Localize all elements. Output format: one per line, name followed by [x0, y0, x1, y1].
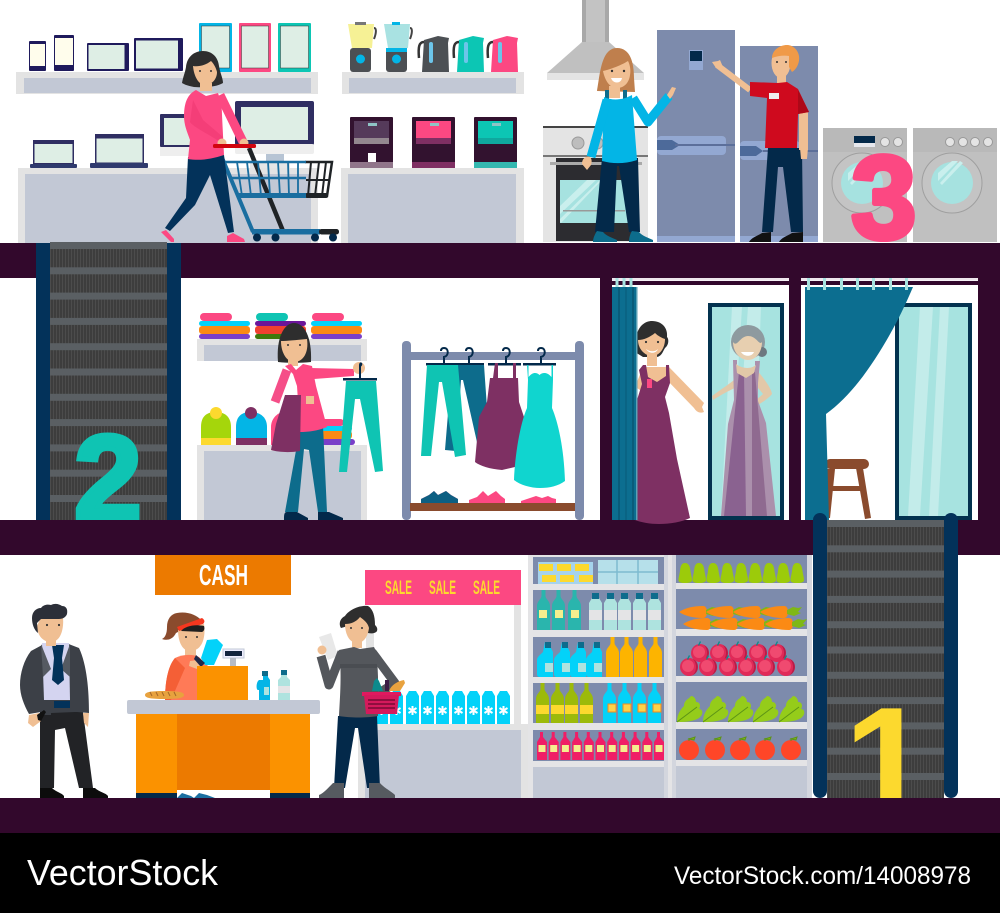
- woman customer in blue: [582, 48, 676, 242]
- mirror: [708, 303, 784, 520]
- detergent and orange bottles: [537, 637, 662, 677]
- supermarket shelves frame: [528, 555, 812, 798]
- watermark: brand: VectorStock: [27, 852, 219, 893]
- counter with hats and stack: [197, 407, 367, 520]
- cyan dress: [514, 365, 565, 488]
- mirror: [895, 303, 972, 520]
- pears: [678, 563, 804, 583]
- CASH sign: CASH: [199, 560, 248, 592]
- coffee machines: [350, 117, 517, 168]
- pink bottles: [537, 732, 664, 760]
- customer with basket: [318, 606, 405, 798]
- numeral 2: 2: [74, 410, 142, 546]
- SALE sign: SALE: [429, 577, 456, 599]
- reflection in mirror: [712, 325, 776, 516]
- escalator from floor 1 to floor 2: [813, 513, 958, 798]
- cashier: [162, 612, 223, 700]
- curtain: [805, 287, 913, 520]
- frozen fish and ice packs: [538, 560, 658, 584]
- watermark bar: [0, 833, 1000, 913]
- laptops: [30, 134, 148, 168]
- lettuce: [677, 696, 804, 722]
- salesman in red: [712, 45, 809, 242]
- floor 3: electronics and appliances: [16, 0, 997, 264]
- shopping basket: [362, 692, 401, 714]
- numeral 1: 1: [844, 675, 930, 848]
- basket goods: [372, 678, 405, 691]
- carrots: [679, 606, 807, 630]
- SALE sign: [365, 570, 521, 605]
- woman browsing jeans: [271, 323, 365, 520]
- security guard: [20, 604, 108, 798]
- CASH sign: [155, 555, 291, 595]
- curtain hooks: [616, 278, 632, 290]
- shopping cart: [218, 148, 339, 242]
- curtain hooks: [807, 278, 908, 290]
- oven and hood: [543, 0, 648, 242]
- washing machines: [823, 128, 997, 242]
- counter: coffee machines: [341, 168, 524, 243]
- teal pants on rack: [421, 365, 466, 457]
- clothes rack: [402, 341, 584, 520]
- purple dress: [475, 363, 524, 470]
- woman in gown: [629, 321, 704, 524]
- escalator from floor 2 to floor 3: [36, 242, 181, 546]
- phones and tablets: [29, 23, 311, 72]
- display counter with milk: [358, 605, 530, 798]
- monitors: [160, 101, 314, 168]
- SALE sign: SALE: [473, 577, 500, 599]
- counter: computers: [18, 168, 318, 243]
- kettles: [419, 36, 518, 72]
- floor slabs and pillars: [0, 243, 1000, 833]
- fitting room 2: [805, 278, 972, 520]
- pulled curtain: [612, 287, 638, 520]
- stool: [825, 459, 871, 519]
- green bottles and mint bottles: [537, 590, 661, 630]
- blenders: [348, 22, 412, 72]
- cash register and counter: [127, 649, 320, 798]
- SALE sign: SALE: [385, 577, 412, 599]
- shopper woman with cart: [161, 51, 248, 242]
- jeans on rack: [445, 365, 490, 451]
- olive and cyan bottles: [536, 683, 661, 723]
- shelf: gadgets: [16, 72, 318, 94]
- tomatoes: [679, 737, 801, 760]
- fitting room 1: [612, 278, 784, 524]
- floor 2: clothing: [197, 313, 584, 520]
- floor 1: supermarket: [20, 555, 812, 798]
- watermark: url: VectorStock.com/14008978: [674, 862, 971, 890]
- shelf: kitchen appliances: [342, 72, 524, 94]
- shelf: folded clothes: [197, 313, 367, 361]
- apples: [680, 641, 795, 676]
- refrigerators: [657, 30, 818, 242]
- numeral 3: 3: [851, 132, 917, 264]
- hanging jeans: [339, 363, 383, 472]
- shoes on rack: [421, 491, 556, 503]
